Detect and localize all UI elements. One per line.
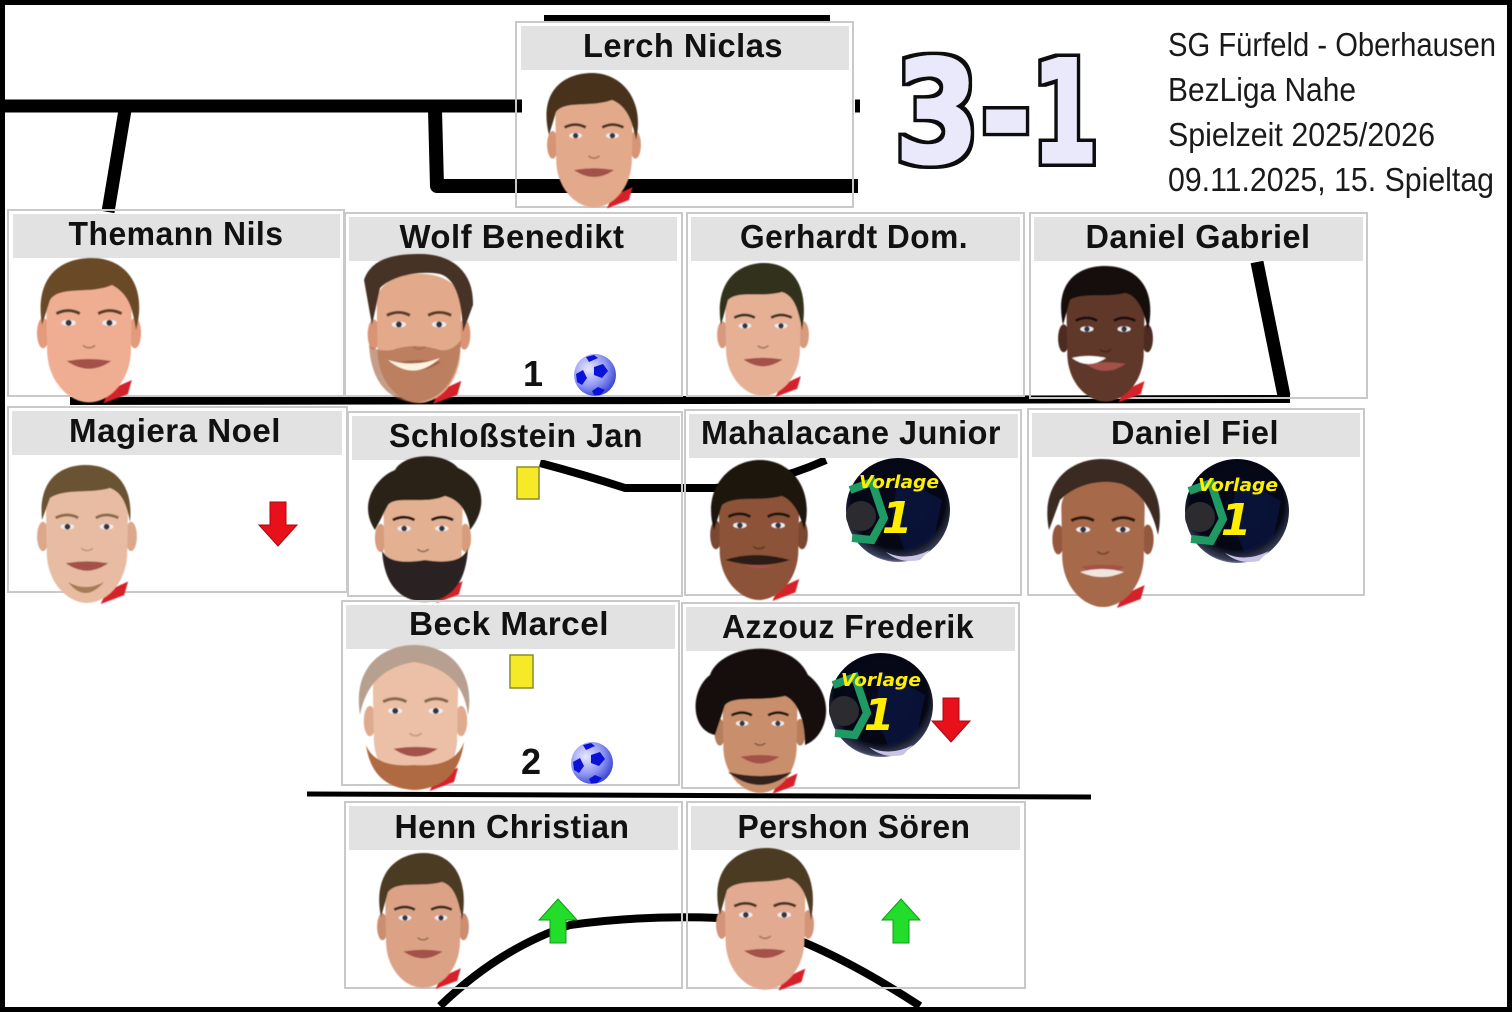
panel: Gerhardt Dom. xyxy=(687,213,1024,397)
icon: substituted off arrow xyxy=(932,698,970,742)
badge: Vorlage ball xyxy=(846,458,950,562)
icon: yellow card xyxy=(517,467,539,499)
panel: Magiera Noel xyxy=(8,407,347,604)
badge: Vorlage ball: 1 xyxy=(882,493,912,544)
icon: substituted on arrow xyxy=(882,899,920,943)
player name: Schloßstein Jan xyxy=(389,417,643,454)
player face xyxy=(364,254,473,404)
panel: Henn Christian xyxy=(345,802,682,989)
panel: Daniel Gabriel xyxy=(1030,213,1367,403)
badge: Vorlage ball: Vorlage xyxy=(841,670,921,691)
pitch line: penalty area top xyxy=(5,100,860,112)
panel: Pershon Sören xyxy=(687,802,1025,991)
player name: Magiera Noel xyxy=(69,412,281,449)
pitch line: left diagonal xyxy=(108,110,125,212)
league: BezLiga Nahe xyxy=(1168,71,1356,108)
pitch line: horizontal midfield xyxy=(70,399,1290,401)
panel: Mahalacane Junior xyxy=(685,410,1021,601)
player name: Beck Marcel xyxy=(409,605,609,642)
badge: Vorlage ball xyxy=(1185,459,1289,563)
panel: Daniel Fiel xyxy=(1028,409,1364,608)
player name: Mahalacane Junior xyxy=(701,414,1001,451)
badge: Vorlage ball: 1 xyxy=(864,690,894,741)
player name: Daniel Gabriel xyxy=(1086,218,1310,255)
goal count: 1 xyxy=(523,353,543,394)
icon: substituted on arrow xyxy=(539,899,577,943)
pitch line: halfway xyxy=(307,794,1091,797)
score: - xyxy=(981,31,1031,196)
panel: Lerch Niclas xyxy=(516,22,853,208)
player face xyxy=(710,460,808,601)
pitch line: curve behind Schloßstein and Mahalacane xyxy=(540,460,826,488)
player face xyxy=(1058,266,1153,403)
panel: Azzouz Frederik xyxy=(682,603,1019,794)
player name: Daniel Fiel xyxy=(1111,414,1279,451)
player name: Henn Christian xyxy=(394,808,630,845)
score: 1 xyxy=(1032,31,1098,196)
badge: Vorlage ball xyxy=(829,653,933,757)
player face xyxy=(359,645,469,791)
icon: soccer ball xyxy=(574,354,616,396)
icon: yellow card xyxy=(510,655,533,688)
score xyxy=(895,31,1098,196)
icon: soccer ball xyxy=(571,742,613,784)
panel: Wolf Benedikt xyxy=(345,213,682,404)
player face xyxy=(37,258,141,403)
player name: Azzouz Frederik xyxy=(722,608,974,645)
player face xyxy=(717,263,809,397)
season: Spielzeit 2025/2026 xyxy=(1168,116,1435,153)
player name: Lerch Niclas xyxy=(583,27,783,64)
player face xyxy=(546,73,641,208)
pitch line: right diagonal xyxy=(1257,262,1284,396)
player name: Pershon Sören xyxy=(738,808,970,845)
icon: substituted off arrow xyxy=(259,502,297,546)
match info xyxy=(1168,26,1496,198)
player face xyxy=(377,853,469,989)
pitch line: top goal bar xyxy=(544,15,830,23)
score: 3 xyxy=(895,31,979,196)
player face xyxy=(696,649,826,794)
player face xyxy=(368,456,481,603)
panel: Themann Nils xyxy=(8,210,344,403)
goal count: 2 xyxy=(521,741,541,782)
player face xyxy=(1047,459,1160,608)
player face xyxy=(37,465,137,604)
pitch line: goal box xyxy=(435,110,858,186)
badge: Vorlage ball: Vorlage xyxy=(1198,475,1278,496)
panel: Schloßstein Jan xyxy=(348,412,682,603)
pitch line: centre circle xyxy=(440,917,920,1006)
badge: Vorlage ball: 1 xyxy=(1221,495,1251,546)
player name: Wolf Benedikt xyxy=(400,218,624,255)
player name: Themann Nils xyxy=(68,215,284,252)
panel: Beck Marcel xyxy=(342,601,679,791)
badge: Vorlage ball: Vorlage xyxy=(859,472,939,493)
player face xyxy=(716,848,814,991)
player name: Gerhardt Dom. xyxy=(740,218,968,255)
